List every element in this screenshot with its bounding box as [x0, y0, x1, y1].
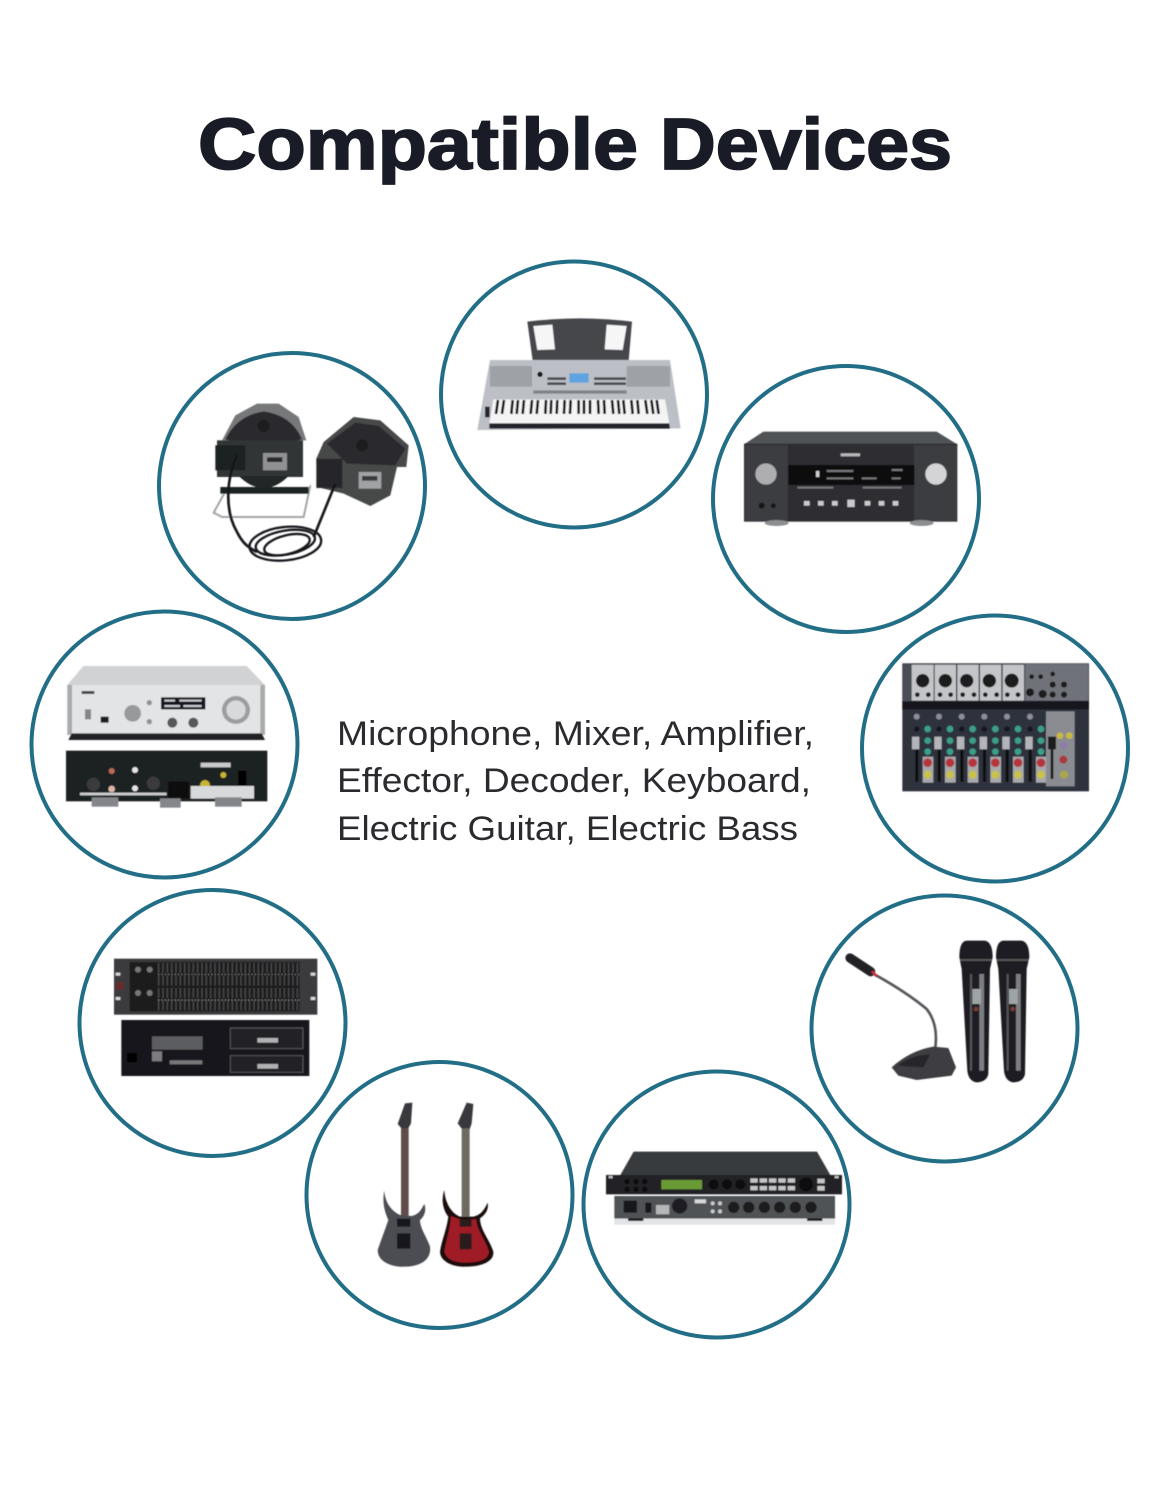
- icon: rack effect processor: [606, 1152, 842, 1225]
- icon: two stage lights with cable: [214, 404, 409, 564]
- text block: device list: Effector, Decoder, Keyboard,: [337, 762, 811, 800]
- text block: device list: Microphone, Mixer, Amplifier,: [337, 715, 814, 753]
- panel: stage lights: [159, 353, 425, 619]
- icon: grey electric guitar: [378, 1103, 430, 1267]
- text block: device list: Electric Guitar, Electric Bass: [337, 810, 798, 848]
- text block: device list: [337, 715, 814, 848]
- icon: silver DAC front and rear: [66, 666, 267, 808]
- panel: microphones: [812, 896, 1078, 1162]
- icon: gooseneck and handheld microphones: [850, 941, 1029, 1082]
- icon: AV receiver: [744, 432, 957, 526]
- panel: keyboard: [441, 262, 707, 528]
- icon: red electric guitar: [440, 1103, 493, 1267]
- panel: amplifier: [713, 366, 979, 632]
- icon: audio mixer: [902, 663, 1089, 791]
- icon: electronic keyboard with music stand: [477, 318, 681, 430]
- title: [198, 105, 952, 185]
- icon: graphic equalizer front and rear: [114, 959, 317, 1076]
- panel: electric guitars: [306, 1062, 572, 1328]
- panel: mixer: [862, 616, 1128, 882]
- panel: hi-fi unit: [32, 612, 298, 878]
- title: Devices: [660, 105, 952, 185]
- panel: effects rack: [584, 1072, 850, 1338]
- panel: equalizer: [80, 890, 346, 1156]
- title: Compatible: [198, 105, 638, 185]
